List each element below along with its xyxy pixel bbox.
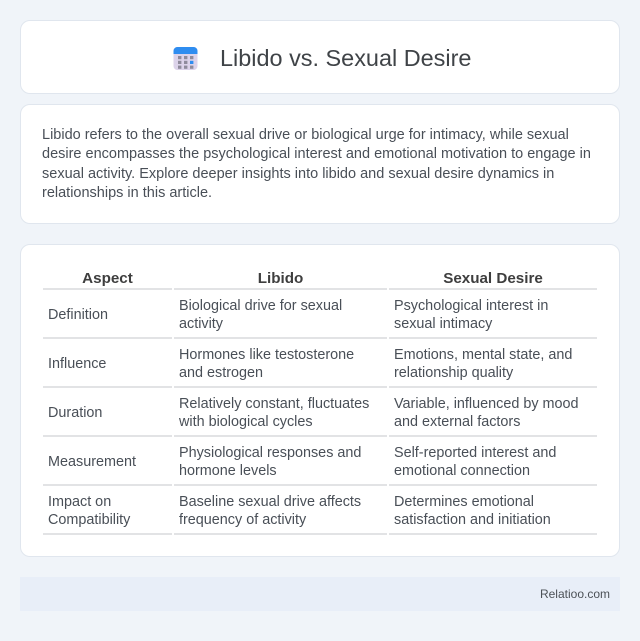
table header: Aspect (82, 270, 133, 287)
table header (82, 270, 543, 287)
table header: Sexual Desire (443, 270, 543, 287)
row: measurement: hormone levels (179, 463, 277, 479)
footer (20, 577, 620, 611)
row: influence: and estrogen (179, 365, 263, 381)
row: influence: Influence (48, 356, 106, 372)
row: duration: Duration (48, 405, 102, 421)
row: influence (48, 347, 572, 381)
row: impact on compatibility: Compatibility (48, 512, 130, 528)
row: impact on compatibility: Baseline sexual drive affects (179, 494, 361, 510)
row: definition: sexual intimacy (394, 316, 492, 332)
row: measurement: emotional connection (394, 463, 530, 479)
row: definition: Psychological interest in (394, 298, 548, 314)
row: duration: with biological cycles (179, 414, 313, 430)
row: duration (48, 396, 579, 430)
intro text: sexual activity. Explore deeper insights into libido and sexual desire dynamics in (42, 166, 554, 182)
intro text: desire encompasses the psychological interest and emotional motivation to engage in (42, 146, 591, 162)
intro text: relationships in this article. (42, 185, 212, 201)
row: measurement: Measurement (48, 454, 136, 470)
row: definition: Definition (48, 307, 108, 323)
footer brand: Relatioo.com (540, 587, 610, 601)
row: impact on compatibility: frequency of activity (179, 512, 306, 528)
row: influence: Hormones like testosterone (179, 347, 354, 363)
row: duration: Relatively constant, fluctuates (179, 396, 369, 412)
row: definition: activity (179, 316, 223, 332)
row: duration: Variable, influenced by mood (394, 396, 579, 412)
row: influence: Emotions, mental state, and (394, 347, 572, 363)
row: measurement: Self-reported interest and (394, 445, 556, 461)
row: impact on compatibility: Impact on (48, 494, 111, 510)
title card (20, 20, 620, 94)
row: impact on compatibility: satisfaction and initiation (394, 512, 551, 528)
intro card (20, 104, 620, 224)
title: Libido vs. Sexual Desire (220, 45, 471, 71)
row: measurement: Physiological responses and (179, 445, 361, 461)
row: duration: and external factors (394, 414, 520, 430)
row: definition (48, 298, 548, 332)
row: influence: relationship quality (394, 365, 513, 381)
intro text (42, 127, 591, 201)
comparison table card (20, 244, 620, 557)
icon: calendar (174, 47, 198, 70)
row: impact on compatibility (48, 494, 551, 528)
row: impact on compatibility: Determines emotional (394, 494, 534, 510)
row: definition: Biological drive for sexual (179, 298, 342, 314)
row: measurement (48, 445, 556, 479)
intro text: Libido refers to the overall sexual drive or biological urge for intimacy, while sexual (42, 127, 569, 143)
table header: Libido (258, 270, 303, 287)
